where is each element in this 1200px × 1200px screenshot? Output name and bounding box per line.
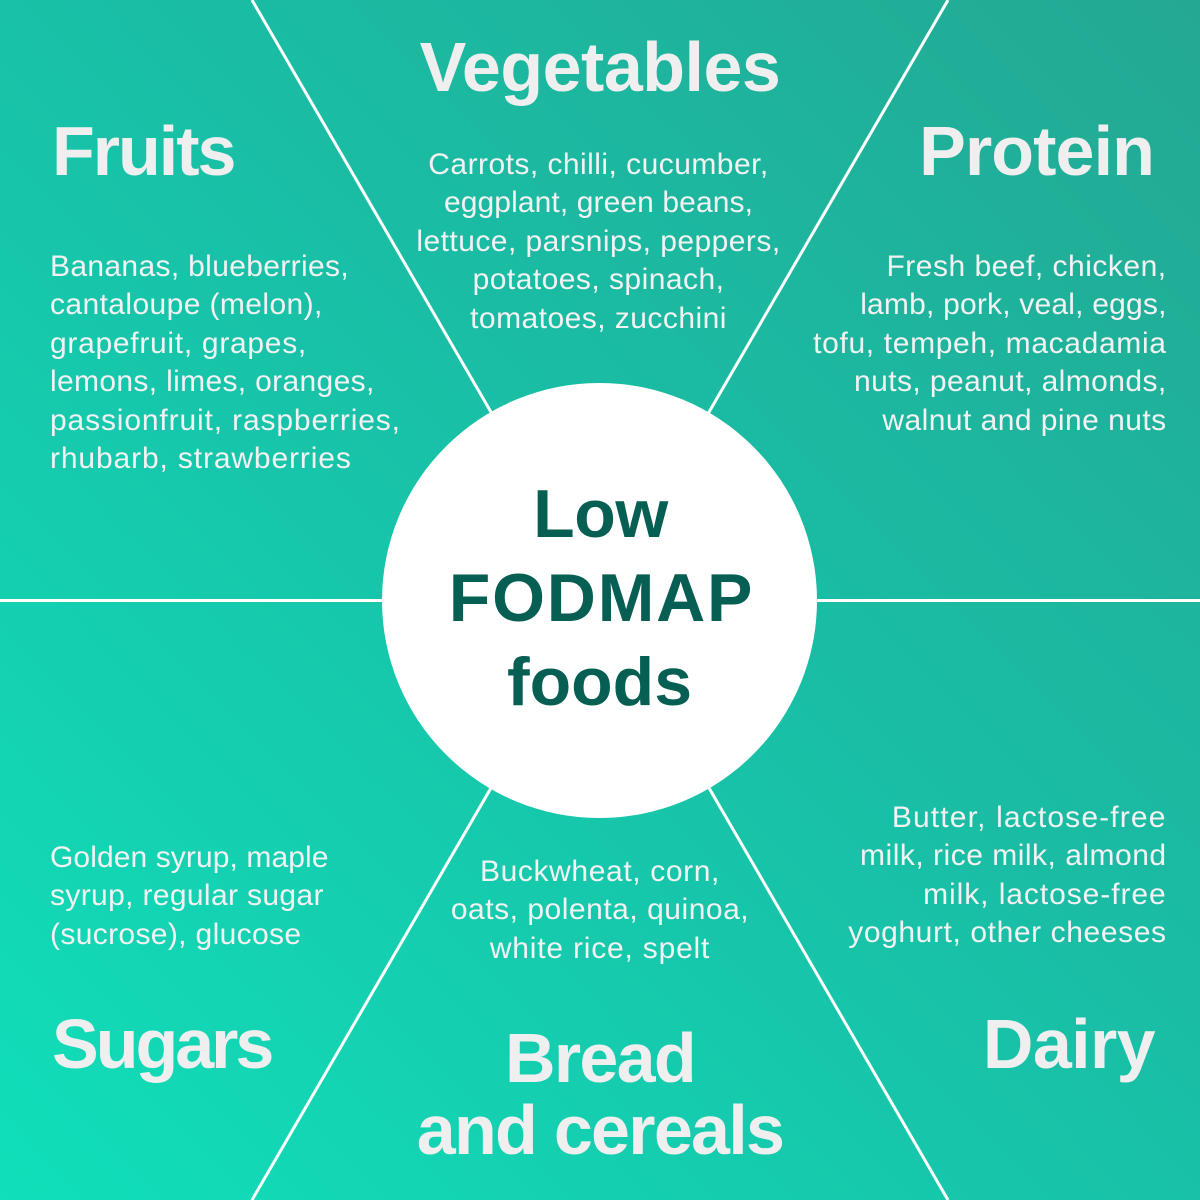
text: dairy list: Butter, lactose-free bbox=[892, 800, 1167, 834]
text: protein list: Fresh beef, chicken, bbox=[886, 250, 1167, 282]
heading: Bread and cereals: Bread bbox=[505, 1019, 695, 1097]
text: bread and cereals list bbox=[451, 854, 749, 964]
center title: Low bbox=[533, 476, 668, 552]
heading: Protein: Protein bbox=[919, 112, 1154, 190]
text: protein list: lamb, pork, veal, eggs, bbox=[860, 288, 1167, 321]
text: vegetables list: tomatoes, zucchini bbox=[470, 302, 727, 334]
text: bread and cereals list: white rice, spelt bbox=[490, 932, 710, 964]
heading: Dairy: Dairy bbox=[983, 1005, 1155, 1083]
text: fruits list: passionfruit, raspberries, bbox=[50, 404, 401, 436]
text: vegetables list: potatoes, spinach, bbox=[473, 263, 724, 296]
text: dairy list: milk, lactose-free bbox=[923, 878, 1167, 910]
heading: Vegetables: Vegetables bbox=[420, 28, 780, 106]
heading: Bread and cereals: and cereals bbox=[417, 1091, 783, 1169]
text: protein list: walnut and pine nuts bbox=[882, 404, 1167, 436]
text: dairy list: yoghurt, other cheeses bbox=[848, 916, 1167, 949]
center title: foods bbox=[507, 644, 692, 720]
heading: Bread and cereals bbox=[417, 1019, 783, 1169]
text: protein list: tofu, tempeh, macadamia bbox=[813, 326, 1167, 360]
text: protein list: nuts, peanut, almonds, bbox=[854, 365, 1167, 398]
text: vegetables list bbox=[416, 148, 781, 334]
text: fruits list bbox=[50, 250, 401, 475]
text: dairy list bbox=[848, 800, 1167, 949]
heading: Sugars: Sugars bbox=[52, 1005, 271, 1083]
text: sugars list: syrup, regular sugar bbox=[50, 879, 324, 912]
text: protein list bbox=[813, 250, 1167, 436]
text: vegetables list: lettuce, parsnips, peppers, bbox=[416, 224, 781, 258]
text: fruits list: lemons, limes, oranges, bbox=[50, 365, 375, 398]
center title bbox=[449, 476, 754, 720]
text: fruits list: Bananas, blueberries, bbox=[50, 250, 349, 282]
text: bread and cereals list: oats, polenta, quinoa, bbox=[451, 893, 749, 926]
text: sugars list bbox=[50, 840, 329, 950]
text: vegetables list: eggplant, green beans, bbox=[444, 186, 753, 219]
text: dairy list: milk, rice milk, almond bbox=[860, 839, 1167, 872]
text: sugars list: Golden syrup, maple bbox=[50, 840, 329, 874]
center circle bbox=[382, 383, 817, 818]
text: fruits list: grapefruit, grapes, bbox=[50, 326, 307, 360]
text: vegetables list: Carrots, chilli, cucumber, bbox=[428, 148, 769, 180]
text: fruits list: cantaloupe (melon), bbox=[50, 288, 323, 321]
heading: Fruits: Fruits bbox=[52, 112, 234, 190]
text: sugars list: (sucrose), glucose bbox=[50, 918, 301, 950]
text: bread and cereals list: Buckwheat, corn, bbox=[480, 854, 720, 888]
text: fruits list: rhubarb, strawberries bbox=[50, 442, 352, 475]
center title: FODMAP bbox=[449, 560, 754, 636]
